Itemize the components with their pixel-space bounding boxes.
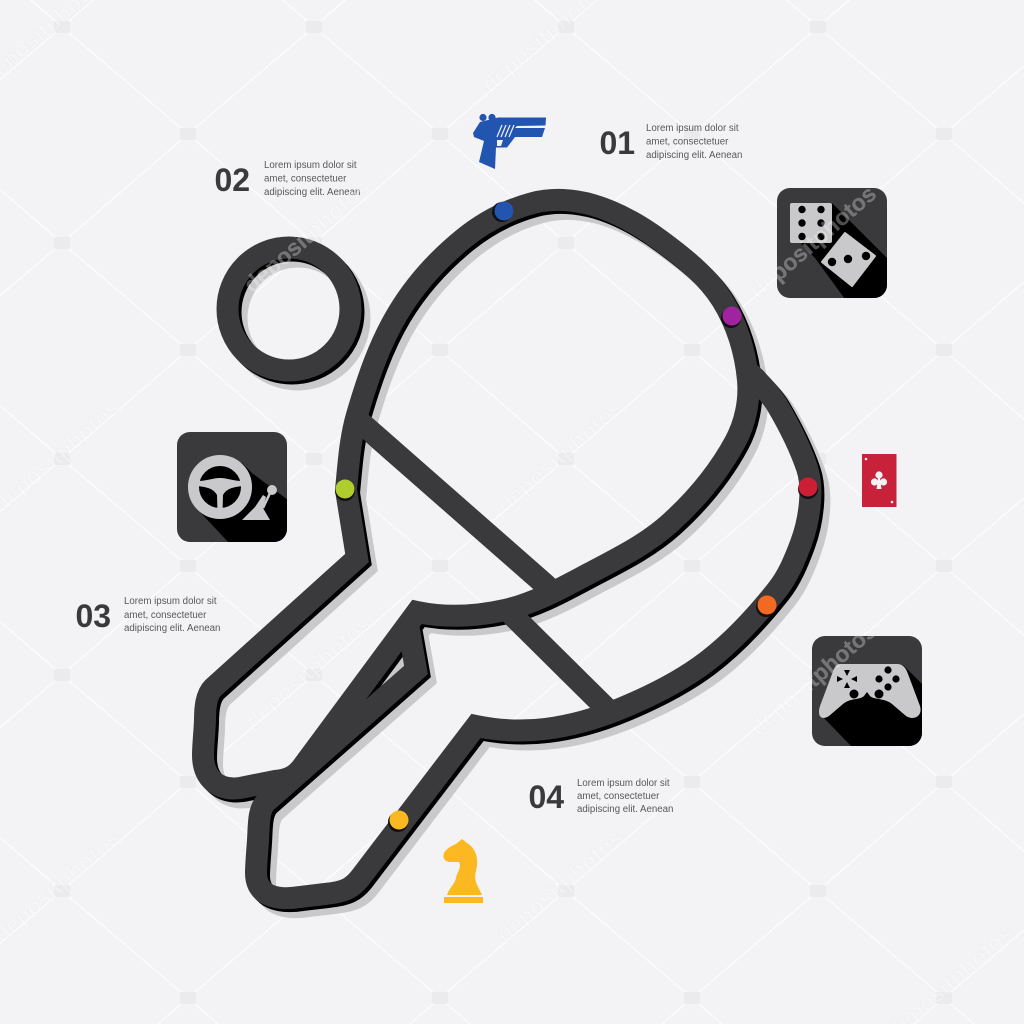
text block 01 [600, 123, 742, 161]
description 04: Lorem ipsum dolor sit [577, 778, 670, 789]
description 02: adipiscing elit. Aenean [264, 187, 360, 198]
number 02: 02 [214, 162, 250, 198]
watermark text: depositphotos [238, 174, 375, 298]
watermark text: depositphotos [744, 180, 881, 304]
paddle black edge [206, 203, 813, 901]
description 03: Lorem ipsum dolor sit [124, 596, 217, 607]
icon: chess knight [443, 839, 483, 903]
icon: playing card [862, 454, 896, 507]
paddle grey cast shadow [212, 209, 819, 907]
text block 02 [214, 160, 360, 198]
description 03: adipiscing elit. Aenean [124, 623, 220, 634]
number 04: 04 [528, 779, 564, 815]
description 04: amet, consectetuer [577, 791, 660, 802]
dot: blue [492, 202, 514, 222]
text block 04 [528, 778, 673, 815]
description 01: Lorem ipsum dolor sit [646, 123, 739, 134]
description 01: adipiscing elit. Aenean [646, 150, 742, 161]
description 04: adipiscing elit. Aenean [577, 804, 673, 815]
watermark text: depositphotos [491, 394, 628, 518]
dot: red [798, 478, 818, 499]
paddle dark outline with ball [203, 200, 810, 898]
description 01: amet, consectetuer [646, 136, 729, 148]
text block 03 [76, 596, 220, 634]
watermark text: depositphotos [744, 617, 881, 741]
dot: yellow [388, 810, 408, 832]
timeline dots [335, 202, 818, 832]
icon: game controller tile [812, 636, 923, 747]
dot: orange [756, 596, 776, 617]
watermark text: depositphotos [491, 824, 628, 948]
description 03: amet, consectetuer [124, 610, 207, 621]
watermark text: depositphotos [239, 610, 376, 734]
dot: lime [335, 480, 355, 501]
dot: purple [721, 306, 742, 328]
number 03: 03 [76, 598, 111, 634]
description 02: amet, consectetuer [264, 174, 347, 184]
number 01: 01 [600, 125, 635, 161]
ping pong paddles line illustration [203, 200, 819, 907]
icon: dice tile [777, 188, 888, 299]
icon: laser gun [473, 114, 546, 169]
icon: steering wheel and gear lever tile [177, 432, 288, 543]
description 02: Lorem ipsum dolor sit [264, 160, 357, 171]
